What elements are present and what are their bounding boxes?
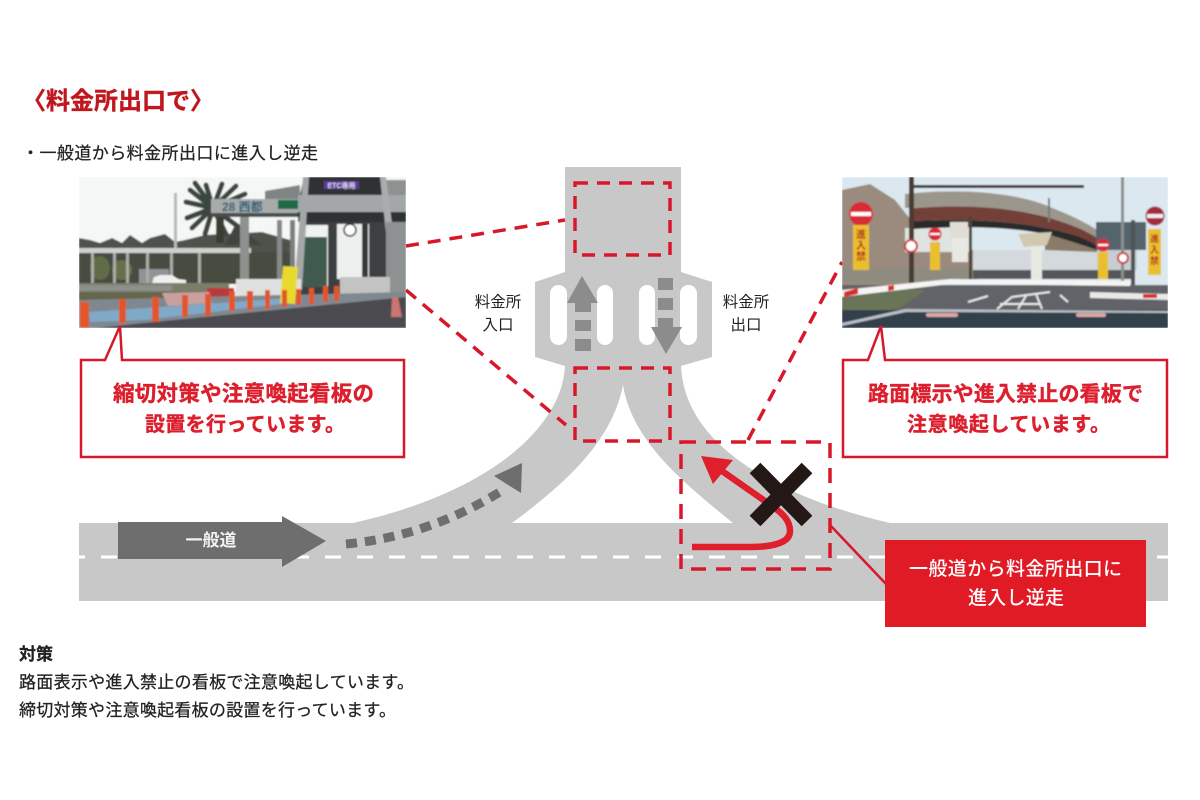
- roof and posts: [79, 248, 251, 253]
- photo: toll booth with cones: 28 西都: [222, 199, 263, 214]
- arrow: wrong-way route: [692, 456, 790, 547]
- callout: wrong-way entry: [830, 525, 1146, 627]
- countermeasures text: 締切対策や注意喚起看板の設置を行っています。: [19, 701, 396, 720]
- white car: [152, 275, 186, 284]
- dashed frame: toll lower: [575, 368, 670, 441]
- label: toll entrance: 入口: [482, 317, 514, 334]
- photo: no-entry signs and road markings: [842, 177, 1168, 328]
- toll plaza: [535, 167, 712, 366]
- photo: no-entry signs and road markings: 禁: [856, 250, 866, 263]
- guardrails: [842, 279, 1130, 297]
- arrow: general road: [118, 516, 326, 567]
- ground: [79, 292, 406, 328]
- callout: left photo: 設置を行っています。: [145, 413, 345, 436]
- photo: no-entry signs and road markings: 禁: [1150, 255, 1159, 266]
- barriers: [236, 279, 301, 297]
- subtitle: ・一般道から料金所出口に進入し逆走: [22, 144, 318, 163]
- background wall: [973, 250, 1097, 270]
- callout: left photo: 縮切対策や注意喚起看板の: [113, 382, 374, 406]
- arrow: general road: 一般道: [186, 531, 236, 550]
- cones: [80, 286, 339, 328]
- countermeasures text: 路面表示や進入禁止の看板で注意喚起しています。: [19, 673, 414, 692]
- no-entry signs: [849, 202, 873, 226]
- canopy sign: [211, 199, 301, 213]
- toll islands: [550, 285, 697, 345]
- vegetation: [842, 184, 975, 292]
- dashed leader lines: [406, 220, 842, 440]
- countermeasures text: 対策: [19, 644, 53, 664]
- arrow: toll exit down: [651, 278, 682, 354]
- photo: no-entry signs and road markings: 入: [1150, 245, 1159, 255]
- callout: right photo: 路面標示や進入禁止の看板で: [868, 383, 1143, 406]
- tree line: [79, 231, 292, 254]
- photo: toll booth with cones: ETC専用: [328, 181, 356, 190]
- road: [842, 285, 1168, 312]
- arrow: toll entrance up: [567, 276, 598, 351]
- label: toll entrance: 料金所: [475, 293, 521, 311]
- road centre line: [79, 556, 1168, 558]
- countermeasures text: [19, 644, 414, 720]
- callout: wrong-way entry: 一般道から料金所出口に: [909, 558, 1122, 580]
- label: toll exit: [723, 293, 769, 334]
- photo: toll booth with cones: [79, 177, 406, 328]
- callout: left photo: [81, 326, 404, 457]
- photo: no-entry signs and road markings: 入: [856, 240, 866, 252]
- dashed frame: toll upper: [575, 183, 670, 255]
- palm: [186, 183, 245, 234]
- callout: right photo: [843, 326, 1167, 457]
- main gantry: [300, 222, 390, 297]
- icon: prohibited cross: [755, 468, 807, 521]
- callout: right photo: 注意喚起しています。: [907, 413, 1110, 436]
- poles: [909, 177, 914, 290]
- general road: [79, 523, 1168, 601]
- branch ramps: [353, 363, 890, 523]
- label: toll exit: 料金所: [723, 293, 769, 311]
- callout: wrong-way entry: 進入し逆走: [968, 587, 1064, 609]
- dashed frame: wrong-way area: [681, 442, 830, 569]
- yellow sign: [280, 266, 298, 304]
- road diagram: [79, 167, 1168, 601]
- label: toll exit: 出口: [730, 316, 762, 334]
- photo: no-entry signs and road markings: 進: [856, 228, 866, 241]
- arrow: dotted route to toll entrance: [346, 463, 522, 544]
- title: 〈料金所出口で〉: [22, 88, 214, 115]
- bridge: [905, 191, 1097, 238]
- photo: no-entry signs and road markings: 進: [1150, 233, 1159, 244]
- label: toll entrance: [475, 293, 521, 334]
